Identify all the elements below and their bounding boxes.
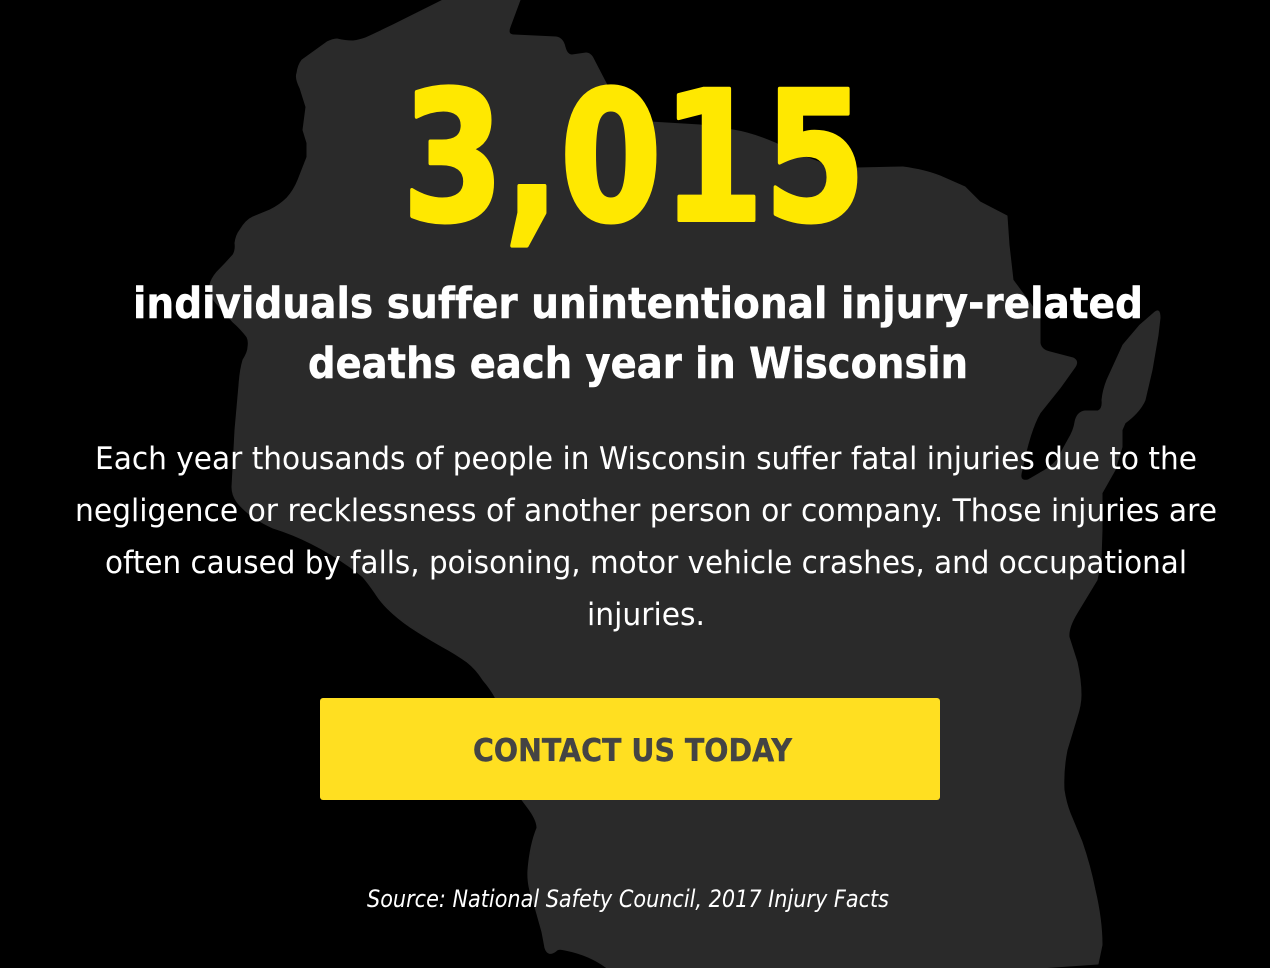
heading: individuals suffer unintentional injury-related xyxy=(133,279,1143,329)
heading xyxy=(133,279,1143,389)
big number: 3,015 xyxy=(402,54,866,263)
body paragraph: Each year thousands of people in Wisconsin suffer fatal injuries due to the xyxy=(95,441,1197,477)
map: Wisconsin silhouette xyxy=(210,0,1160,968)
source note: Source: National Safety Council, 2017 Injury Facts xyxy=(367,885,889,913)
button: contact us today xyxy=(320,698,940,800)
body paragraph: often caused by falls, poisoning, motor vehicle crashes, and occupational xyxy=(105,545,1187,581)
body paragraph: negligence or recklessness of another person or company. Those injuries are xyxy=(75,493,1217,529)
body paragraph xyxy=(75,441,1217,633)
button: contact us today: CONTACT US TODAY xyxy=(473,733,793,769)
heading: deaths each year in Wisconsin xyxy=(308,339,968,389)
body paragraph: injuries. xyxy=(587,597,705,633)
